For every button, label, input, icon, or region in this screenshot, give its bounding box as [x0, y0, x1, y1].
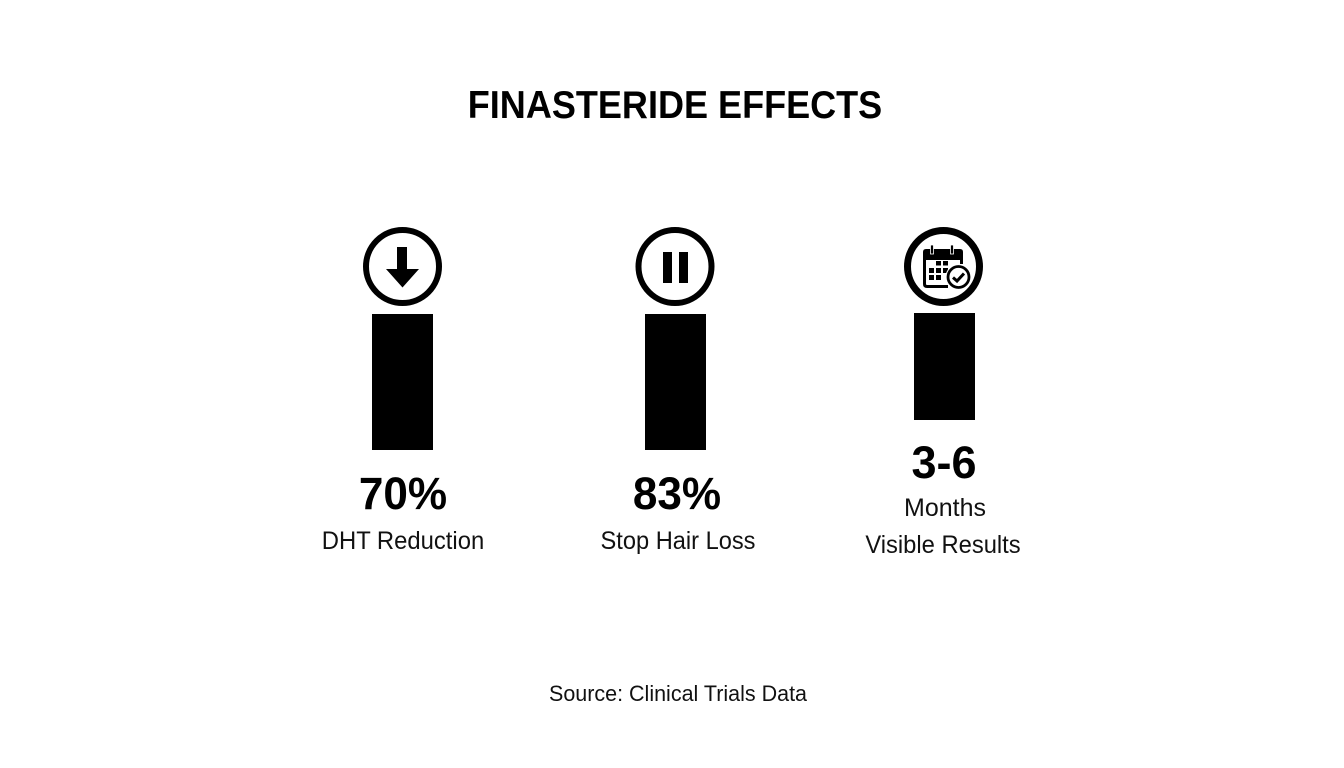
bar: visible results — [914, 313, 975, 420]
source note: Source: Clinical Trials Data — [549, 681, 807, 706]
bar: DHT reduction — [372, 314, 433, 450]
label: Visible Results: Visible Results — [865, 531, 1021, 559]
icon: pause — [636, 227, 714, 306]
value: 3-6: 3-6 — [911, 437, 977, 488]
bar: stop hair loss — [645, 314, 706, 450]
label: Stop Hair Loss: Stop Hair Loss — [600, 527, 755, 555]
icon: calendar with check — [904, 227, 983, 306]
label: Months: Months — [904, 494, 986, 522]
label: DHT Reduction: DHT Reduction — [322, 527, 484, 555]
title: FINASTERIDE EFFECTS — [467, 84, 882, 127]
value: 70%: 70% — [359, 468, 447, 519]
value: 83%: 83% — [633, 468, 721, 519]
icon: down arrow — [363, 227, 442, 306]
